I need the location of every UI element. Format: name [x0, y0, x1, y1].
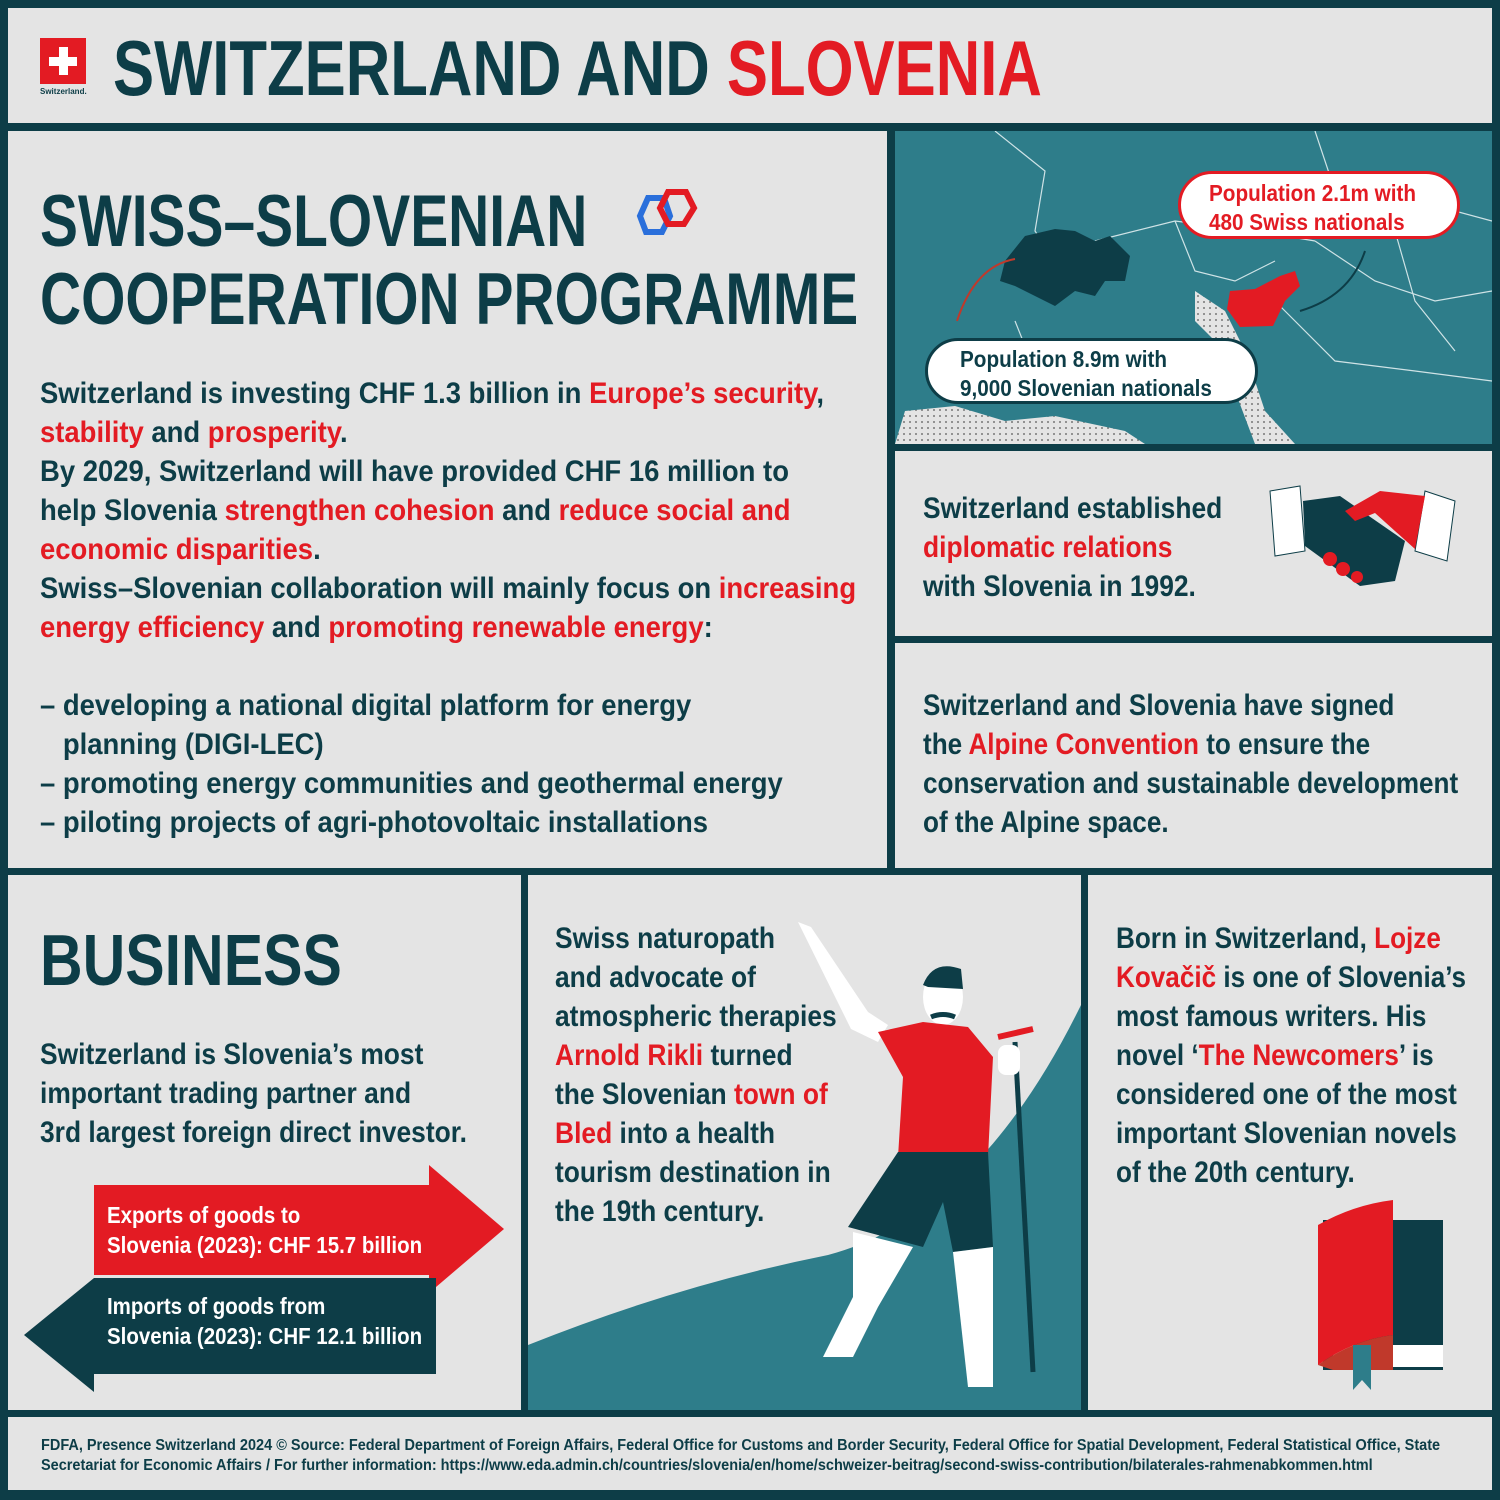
body text: energy efficiency and promoting renewable energy:	[40, 611, 713, 644]
callout: slovenia population	[1178, 171, 1460, 239]
text	[555, 922, 837, 1228]
panel: diplomatic relations	[895, 451, 1492, 636]
icon: linked hexagons	[636, 189, 698, 235]
text: most famous writers. His	[1116, 1000, 1426, 1033]
body text: economic disparities.	[40, 533, 321, 566]
arrow: imports: Slovenia (2023): CHF 12.1 billion	[107, 1323, 422, 1349]
callout: switzerland population: Population 8.9m with	[960, 346, 1167, 372]
heading: SWISS–SLOVENIAN	[40, 181, 587, 262]
footer source: FDFA, Presence Switzerland 2024 © Source: Federal Department of Foreign Affairs, Federal Office for Customs and Border Security, Federal Office for Spatial Development, Federal Statistical Office, State	[41, 1437, 1440, 1454]
panel: alpine convention	[895, 643, 1492, 868]
text	[1116, 922, 1466, 1189]
text: Switzerland and Slovenia have signed	[923, 689, 1394, 722]
mountain	[528, 1005, 1081, 1410]
body text: stability and prosperity.	[40, 416, 348, 449]
text: tourism destination in	[555, 1156, 831, 1189]
text	[40, 1038, 467, 1149]
switzerland	[1000, 229, 1130, 306]
text: atmospheric therapies	[555, 1000, 837, 1033]
text: Arnold Rikli turned	[555, 1039, 793, 1072]
body text: – piloting projects of agri-photovoltaic installations	[40, 806, 708, 839]
text: diplomatic relations	[923, 531, 1172, 564]
body text	[40, 377, 856, 839]
arrow: imports: Imports of goods from	[107, 1293, 325, 1319]
body text: help Slovenia strengthen cohesion and reduce social and	[40, 494, 791, 527]
text: novel ‘The Newcomers’ is	[1116, 1039, 1434, 1072]
icon: handshake	[1270, 485, 1456, 586]
footer source: Secretariat for Economic Affairs / For further information: https://www.eda.admin.ch/countries/slovenia/en/home/schweizer-beitrag/second-swiss-contribution/bilaterales-rahmenabkommen.html	[41, 1457, 1373, 1474]
text: Bled into a health	[555, 1117, 775, 1150]
arrow: imports	[24, 1278, 436, 1392]
text: Kovačič is one of Slovenia’s	[1116, 961, 1466, 994]
text: the Slovenian town of	[555, 1078, 828, 1111]
text	[923, 492, 1222, 603]
panel: business	[8, 875, 521, 1410]
title: SWITZERLAND AND SLOVENIA	[113, 24, 1042, 112]
text: conservation and sustainable development	[923, 767, 1458, 800]
callout: switzerland population	[925, 338, 1258, 404]
panel: lojze kovacic	[1088, 875, 1492, 1410]
illustration: hiker	[798, 922, 1036, 1387]
callout: slovenia population: Population 2.1m with	[1209, 180, 1416, 206]
callout: slovenia population: 480 Swiss nationals	[1209, 209, 1405, 235]
text: of the 20th century.	[1116, 1156, 1355, 1189]
body text: – promoting energy communities and geothermal energy	[40, 767, 783, 800]
text: the 19th century.	[555, 1195, 764, 1228]
text: Switzerland established	[923, 492, 1222, 525]
text: Swiss naturopath	[555, 922, 775, 955]
footer source	[8, 1417, 1492, 1490]
panel: arnold rikli	[528, 875, 1081, 1410]
text: Switzerland is Slovenia’s most	[40, 1038, 423, 1071]
slovenia	[1227, 271, 1300, 327]
panel: map	[895, 131, 1492, 444]
body text: Switzerland is investing CHF 1.3 billion in Europe’s security,	[40, 377, 824, 410]
body text: Swiss–Slovenian collaboration will mainly focus on increasing	[40, 572, 856, 605]
arrow: exports: Exports of goods to	[107, 1202, 300, 1228]
text: and advocate of	[555, 961, 756, 994]
text: considered one of the most	[1116, 1078, 1457, 1111]
text	[923, 689, 1458, 839]
arrow: exports: Slovenia (2023): CHF 15.7 billion	[107, 1232, 422, 1258]
body text: – developing a national digital platform for energy	[40, 689, 691, 722]
text: important Slovenian novels	[1116, 1117, 1457, 1150]
body text: planning (DIGI-LEC)	[63, 728, 324, 761]
icon: book	[1318, 1200, 1443, 1390]
logo: swiss flag: Switzerland.	[40, 87, 87, 96]
callout: switzerland population: 9,000 Slovenian nationals	[960, 375, 1212, 401]
header panel	[8, 8, 1492, 123]
text: Born in Switzerland, Lojze	[1116, 922, 1441, 955]
text: 3rd largest foreign direct investor.	[40, 1116, 467, 1149]
body text: By 2029, Switzerland will have provided CHF 16 million to	[40, 455, 789, 488]
text: with Slovenia in 1992.	[923, 570, 1196, 603]
heading: COOPERATION PROGRAMME	[40, 259, 858, 340]
arrow: exports	[94, 1165, 504, 1287]
text: the Alpine Convention to ensure the	[923, 728, 1370, 761]
logo: swiss flag	[40, 38, 87, 96]
heading	[40, 181, 858, 340]
panel: cooperation programme	[8, 131, 887, 868]
text: important trading partner and	[40, 1077, 411, 1110]
text: of the Alpine space.	[923, 806, 1169, 839]
heading: BUSINESS	[40, 921, 342, 1001]
